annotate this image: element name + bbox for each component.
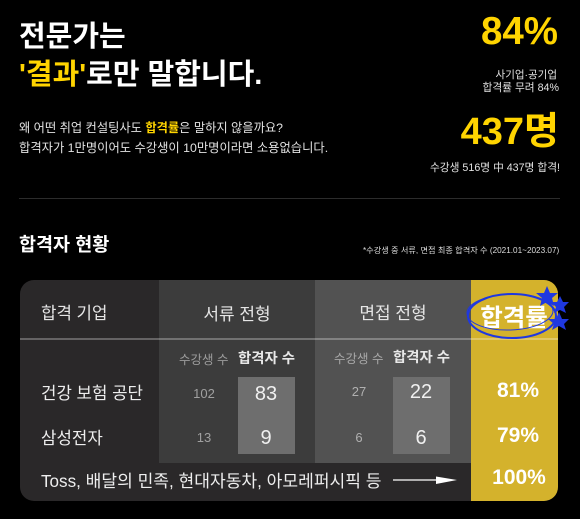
stat: 437명: 수강생 516명 中 437명 합격!: [430, 162, 560, 174]
row: 삼성전자: 삼성전자: [41, 429, 103, 448]
results table: 83: [255, 383, 277, 405]
results table: 6: [355, 430, 363, 445]
results table: 100%: [492, 466, 546, 489]
subheader: document: 수강생 수: [179, 353, 228, 367]
stat: 84%: 사기업·공기업: [496, 69, 557, 81]
row: other companies: Toss, 배달의 민족, 현대자동차, 아모레퍼시픽 등: [41, 472, 382, 491]
bar: document passers: [238, 377, 295, 454]
title: [19, 21, 262, 91]
column: interview: [315, 280, 471, 463]
column: document screening: [159, 280, 315, 463]
intro text: [19, 121, 328, 155]
results table: 81%: [497, 379, 539, 402]
icon: hand-drawn circle with stars: [466, 286, 569, 339]
results table: 합격자 수: [393, 350, 450, 366]
arrow: [393, 476, 457, 484]
results table: 79%: [497, 424, 539, 447]
intro text: 왜 어떤 취업 컨설팅사도 합격률은 말하지 않을까요?: [19, 121, 283, 135]
header: companies: 합격 기업: [41, 304, 107, 323]
column: pass rate: [471, 280, 558, 501]
row: 건강 보험 공단: 건강 보험 공단: [41, 384, 143, 403]
header: pass rate: 합격률: [480, 305, 548, 332]
results table: 합격자 수: [238, 351, 295, 367]
results table: 27: [352, 384, 366, 399]
subheader: interview: 수강생 수: [334, 352, 383, 366]
results table: 22: [410, 381, 432, 403]
results table: 9: [260, 427, 272, 449]
intro text: 합격자가 1만명이어도 수강생이 10만명이라면 소용없습니다.: [19, 141, 328, 155]
title: '결과'로만 말합니다.: [19, 59, 262, 91]
footnote: *수강생 중 서류, 면접 최종 합격자 수 (2021.01~2023.07): [363, 246, 559, 255]
results table: [20, 280, 558, 501]
results table: 6: [415, 427, 427, 449]
results table: 102: [193, 386, 215, 401]
stat: 84%: 합격률 무려 84%: [482, 82, 559, 94]
stat: 84%: 84%: [481, 10, 558, 53]
stat: 437명: 437명: [461, 111, 559, 153]
title: 전문가는: [19, 21, 126, 53]
section heading: 합격자 현황: [19, 234, 109, 255]
header: document screening: 서류 전형: [203, 305, 271, 324]
bar: interview passers: [393, 377, 450, 454]
stat: 84%: [481, 10, 559, 94]
header: interview: 면접 전형: [359, 304, 427, 323]
stat: 437명: [430, 111, 560, 174]
results table: 13: [197, 430, 211, 445]
